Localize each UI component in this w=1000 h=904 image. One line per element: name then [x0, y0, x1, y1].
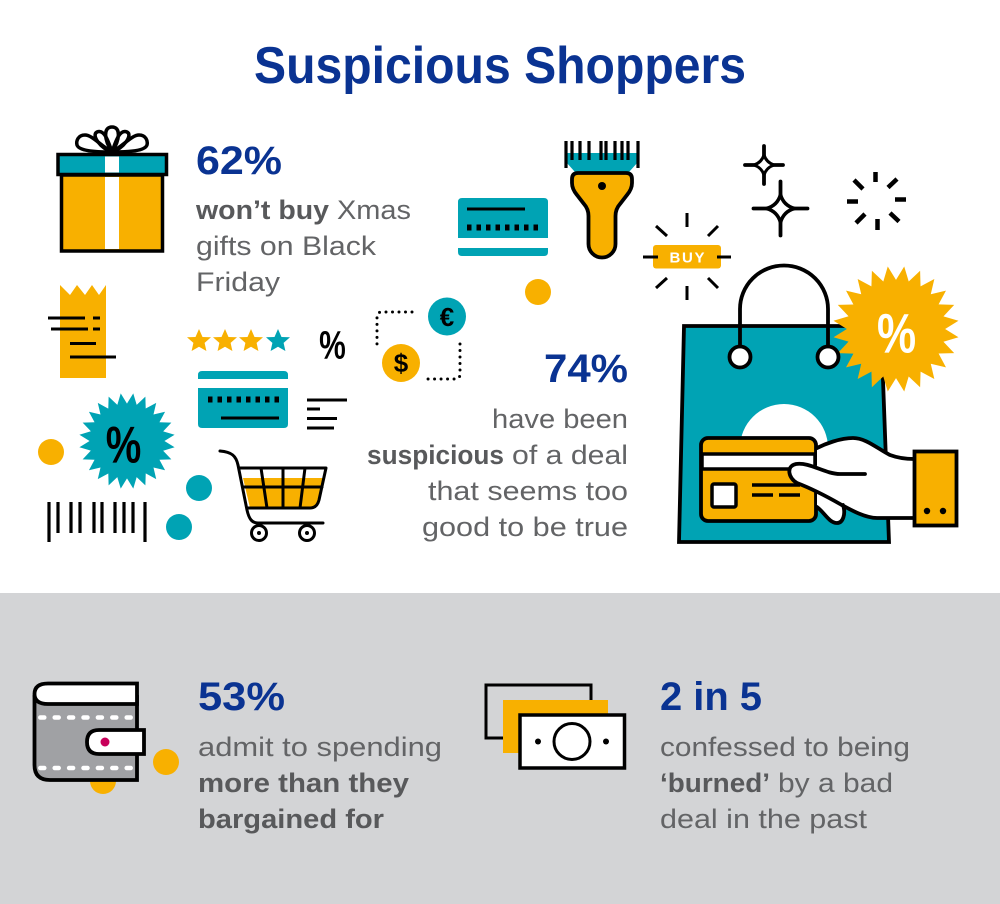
icon: sparkle small — [745, 146, 783, 184]
stat: 53%: bargained for — [198, 804, 385, 834]
stat: 53% — [198, 675, 442, 834]
stat: 2 in 5: 2 in 5 — [660, 675, 762, 719]
icon: shopping cart — [220, 451, 326, 540]
stat: 74%: have been — [492, 404, 628, 434]
icon: teal card right — [458, 198, 548, 256]
stat: 62%: Xmas — [337, 195, 411, 225]
stat: 2 in 5: deal in the past — [660, 804, 868, 834]
stat: 2 in 5: confessed to being — [660, 732, 910, 762]
yellow discount burst: % — [877, 301, 916, 365]
stat: 53%: 53% — [198, 675, 285, 719]
stat: 74%: of a deal — [512, 440, 628, 470]
icon: currency exchange: $ — [394, 348, 409, 378]
stat: 74%: good to be true — [422, 512, 628, 542]
icon: currency exchange — [377, 298, 466, 382]
icon: teal discount burst: % — [106, 415, 141, 474]
title: Suspicious Shoppers — [254, 37, 746, 95]
stat: 2 in 5: ‘burned’ — [660, 768, 770, 798]
icon: barcode scanner — [566, 141, 638, 258]
stat: 53%: admit to spending — [198, 732, 442, 762]
icon: teal card left — [198, 371, 288, 428]
stat: 2 in 5 — [660, 675, 910, 834]
yellow dot beside wallet — [153, 749, 179, 775]
icon: buy tag — [643, 213, 731, 300]
bag handle — [740, 266, 828, 356]
hand — [789, 438, 914, 523]
teal dot upper — [186, 475, 212, 501]
cuff — [914, 452, 956, 526]
stat: 74% — [367, 347, 628, 542]
stat: 53%: more than they — [198, 768, 409, 798]
icon: teal discount burst — [73, 387, 181, 495]
stat: 74%: 74% — [544, 347, 628, 391]
icon: wallet — [34, 684, 144, 780]
icon: currency exchange: € — [440, 302, 454, 332]
stat: 62%: Friday — [196, 267, 281, 297]
icon: banknotes — [486, 685, 624, 768]
icon: text lines — [307, 400, 347, 428]
yellow dot behind wallet — [90, 768, 116, 794]
grey lower panel — [0, 593, 1000, 904]
icon: buy tag: BUY — [670, 250, 704, 266]
stat: 62%: won’t buy — [195, 195, 329, 225]
icon: radial spark lines — [847, 172, 906, 230]
white background — [0, 0, 1000, 593]
yellow dot centre — [525, 279, 551, 305]
bag eyelets — [730, 346, 838, 368]
icon: sparkle large — [754, 182, 808, 236]
icon: percent sign: % — [319, 322, 346, 368]
icon: gift box — [58, 127, 166, 251]
stat: 2 in 5: by a bad — [778, 768, 893, 798]
stat: 74%: that seems too — [428, 476, 628, 506]
teal dot lower — [166, 514, 192, 540]
icon: star rating — [187, 329, 290, 351]
icon: shopping bag with card and hand — [679, 258, 967, 542]
yellow dot left — [38, 439, 64, 465]
stat: 74%: suspicious — [367, 440, 504, 470]
stat: 62%: gifts on Black — [196, 231, 377, 261]
stat: 62% — [195, 139, 411, 297]
yellow discount burst — [825, 258, 967, 400]
bag white circle — [740, 404, 828, 492]
icon: receipt — [48, 285, 116, 378]
icon: barcode — [49, 502, 145, 542]
stat: 62%: 62% — [196, 139, 282, 183]
credit card — [701, 438, 816, 521]
bag body — [679, 326, 889, 542]
